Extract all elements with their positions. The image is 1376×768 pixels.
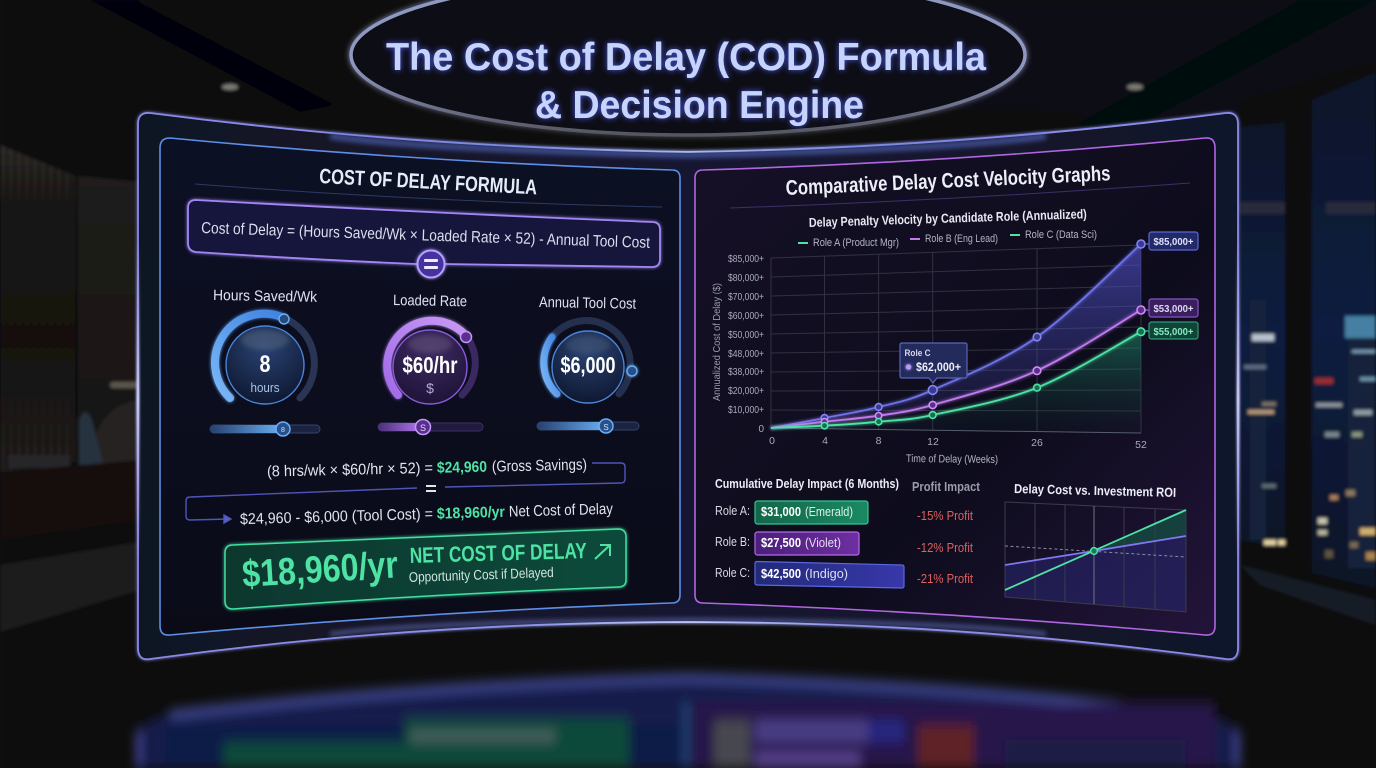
formula box [188, 200, 660, 267]
slider: loaded rate: S [420, 423, 426, 433]
dial: hours saved: Hours Saved/Wk [213, 287, 318, 306]
row: role B: -12% Profit [917, 540, 973, 555]
callout: net cost of delay [225, 529, 626, 609]
calculation line: gross savings [267, 457, 587, 480]
callout: net cost of delay: Opportunity Cost if Delayed [409, 564, 554, 585]
value label: indigo [1145, 232, 1198, 250]
row: role B: (Violet) [805, 535, 841, 550]
outer curved glass panel [138, 113, 1238, 659]
row: role A [715, 501, 973, 524]
row: role B [715, 532, 973, 555]
calculation line: gross savings: $24,960 [437, 459, 487, 477]
slider: hours saved [210, 422, 320, 436]
chart: delay cost vs investment ROI: Delay Cost vs. Investment ROI [1014, 481, 1176, 500]
x-axis labels: 0 [769, 435, 775, 447]
y-axis title: Annualized Cost of Delay ($) [711, 283, 723, 401]
dial: loaded rate [387, 292, 475, 404]
calculation line: gross savings: (Gross Savings) [492, 457, 587, 476]
x-axis labels: 12 [927, 436, 939, 448]
chart: delay cost vs investment ROI [1005, 481, 1186, 612]
x-axis labels: 52 [1135, 439, 1147, 451]
chart legend: Role B (Eng Lead) [925, 233, 998, 245]
left panel frame [160, 138, 680, 635]
callout: net cost of delay: $18,960/yr [241, 544, 399, 596]
y-axis labels: $60,000+ [728, 311, 764, 322]
slider: annual tool cost: S [603, 423, 609, 432]
value label: violet [1145, 299, 1198, 317]
y-axis labels: $38,000+ [728, 367, 764, 378]
y-axis labels: $20,000+ [728, 386, 764, 397]
table: cumulative delay impact: Cumulative Delay Impact (6 Months) [715, 477, 899, 491]
tooltip: role C: $62,000+ [916, 360, 961, 374]
x-axis title: Time of Delay (Weeks) [906, 453, 998, 466]
curve: emerald [771, 332, 1141, 428]
line chart: delay penalty velocity [711, 206, 1198, 466]
dial: annual tool cost: Annual Tool Cost [539, 294, 637, 313]
data points [821, 240, 1145, 429]
slider: loaded rate [378, 420, 483, 434]
y-axis labels: $50,000+ [728, 330, 764, 341]
row: role C [715, 562, 973, 588]
tooltip: role C [900, 343, 967, 383]
row: role A: (Emerald) [805, 504, 853, 519]
y-axis labels: $10,000+ [728, 405, 764, 416]
y-axis labels: $80,000+ [728, 273, 764, 284]
calculation line: net cost [240, 501, 613, 528]
dial: loaded rate: $ [426, 380, 434, 396]
y-axis labels: $48,000+ [728, 349, 764, 360]
right panel frame [695, 138, 1215, 635]
chart grid [771, 245, 1141, 433]
dial: hours saved: 8 [260, 351, 270, 378]
dial: loaded rate: $60/hr [402, 352, 458, 378]
slider: hours saved: 8 [281, 427, 285, 434]
panel heading: COST OF DELAY FORMULA [319, 165, 538, 199]
x-axis labels: 8 [876, 435, 882, 447]
row: role A: -15% Profit [917, 508, 973, 523]
row: role B: Role B: [715, 534, 750, 549]
row: role A: $31,000 [761, 504, 801, 519]
y-axis labels: $70,000+ [728, 292, 764, 303]
tooltip: role C: Role C [904, 348, 931, 359]
row: role A: Role A: [715, 503, 750, 518]
area fills [771, 244, 1141, 428]
callout: net cost of delay: NET COST OF DELAY [409, 538, 587, 568]
y-axis labels: 0 [758, 424, 764, 435]
y-axis labels: $85,000+ [728, 254, 764, 265]
calculation line: net cost: Net Cost of Delay [509, 501, 613, 521]
slider: annual tool cost [537, 419, 639, 433]
value label: indigo: $85,000+ [1154, 236, 1194, 248]
dial: annual tool cost [539, 294, 637, 403]
table: cumulative delay impact [715, 477, 981, 588]
x-axis labels [769, 435, 1147, 451]
value label: violet: $53,000+ [1154, 303, 1194, 315]
row: role B: $27,500 [761, 535, 801, 550]
calculation line: gross savings: (8 hrs/wk × $60/hr × 52) = [267, 460, 433, 480]
panel: cost of delay formula [160, 138, 680, 635]
icon: up arrow [595, 545, 610, 559]
x-axis labels: 4 [822, 435, 828, 447]
calculation line: net cost: $24,960 - $6,000 (Tool Cost) = [240, 506, 433, 528]
row: role C: Role C: [715, 565, 750, 580]
x-axis labels: 26 [1031, 437, 1043, 449]
dial: hours saved [213, 287, 318, 404]
floor reflection of the panel [138, 677, 1238, 768]
icon: equals badge [418, 250, 444, 278]
title text: The Cost of Delay (COD) Formula [386, 36, 986, 79]
title with glowing ellipse [351, 0, 1025, 135]
equals sign [426, 485, 436, 492]
y-axis labels [728, 254, 764, 435]
title text [386, 36, 986, 127]
row: role C: (Indigo) [805, 566, 848, 581]
dial: loaded rate: Loaded Rate [393, 292, 467, 310]
row: role C: $42,500 [761, 566, 801, 581]
chart legend: Role C (Data Sci) [1025, 229, 1097, 241]
dial: hours saved: hours [250, 380, 280, 395]
table: cumulative delay impact: Profit Impact [912, 480, 981, 494]
formula box: Cost of Delay = (Hours Saved/Wk × Loaded Rate × 52) - Annual Tool Cost [201, 220, 651, 252]
curve: indigo [771, 244, 1141, 428]
chart legend [798, 229, 1097, 249]
panel heading: Comparative Delay Cost Velocity Graphs [785, 162, 1111, 200]
arrow: connector between calculations [186, 463, 625, 523]
value label: emerald [1145, 322, 1198, 339]
value label: emerald: $55,000+ [1154, 326, 1194, 338]
panel: comparative delay cost velocity graphs [695, 138, 1215, 635]
chart legend: Role A (Product Mgr) [813, 237, 899, 249]
row: role C: -21% Profit [917, 571, 973, 586]
dial: annual tool cost: $6,000 [560, 352, 616, 378]
title text: & Decision Engine [535, 84, 864, 127]
title ellipse ring [351, 0, 1025, 135]
calculation line: net cost: $18,960/yr [437, 504, 505, 523]
curve: violet [771, 310, 1141, 428]
chart title: Delay Penalty Velocity by Candidate Role (Annualized) [809, 206, 1087, 230]
